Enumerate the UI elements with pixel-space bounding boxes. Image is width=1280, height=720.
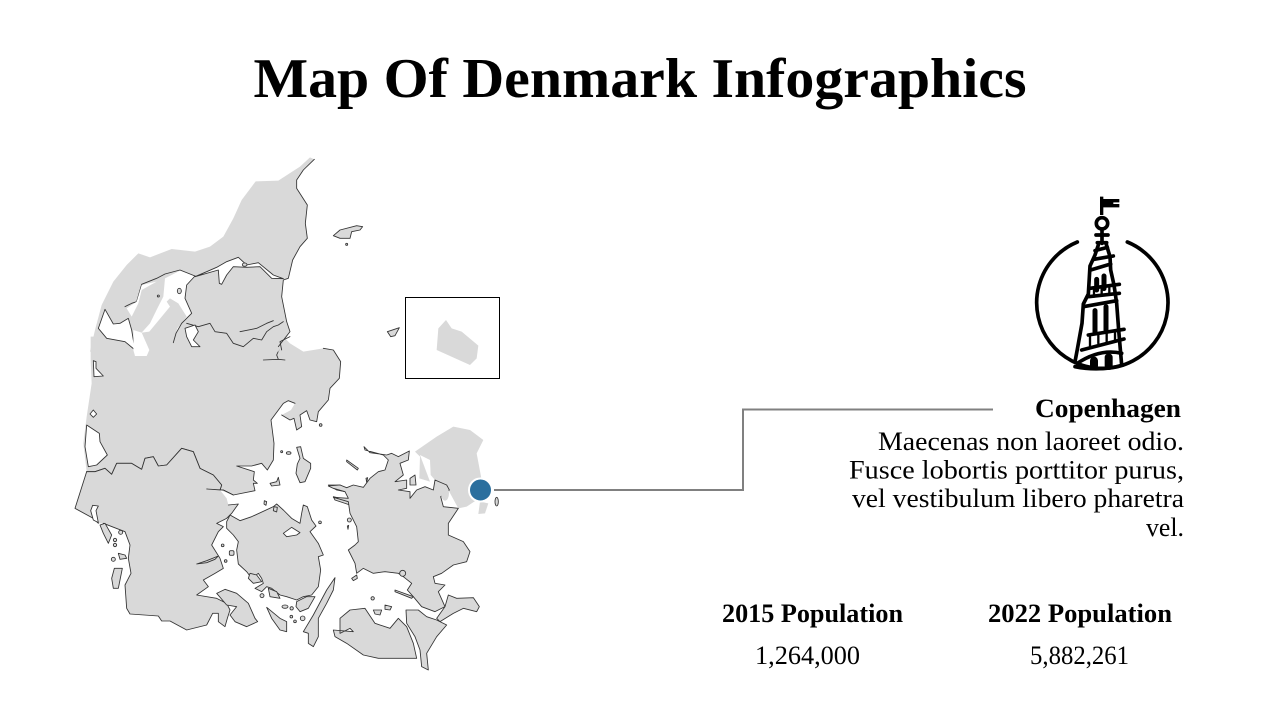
- island: Ærø: [267, 607, 287, 632]
- island: Samsø: [296, 447, 311, 483]
- island: Falster: [406, 610, 447, 670]
- label: Copenhagen: Copenhagen: [1035, 394, 1182, 423]
- stat: 2022 population: 2022 Population: [988, 599, 1173, 628]
- small islands: [111, 501, 321, 623]
- island: Langeland: [303, 578, 335, 647]
- description text: vel vestibulum libero pharetra: [852, 484, 1184, 513]
- map of Denmark: [75, 157, 500, 670]
- island: Rømø: [112, 568, 122, 588]
- stat: 2015 population: 1,264,000: [755, 641, 860, 670]
- description text: Fusce lobortis porttitor purus,: [849, 456, 1184, 484]
- description text: vel.: [1146, 513, 1184, 542]
- island: Møn: [437, 595, 479, 622]
- connector line: [494, 410, 993, 490]
- island: Tåsinge: [296, 597, 315, 612]
- stat: 2022 population: [988, 599, 1173, 670]
- region: central Jutland: [83, 337, 350, 505]
- island: Zealand: [328, 447, 470, 612]
- spire: [1075, 218, 1124, 369]
- stat: 2015 population: [722, 599, 904, 670]
- island: Funen: [227, 504, 323, 600]
- island: Als: [217, 589, 258, 627]
- island: Læsø: [333, 226, 363, 245]
- location marker: Copenhagen: [469, 478, 492, 502]
- description text: [849, 427, 1184, 542]
- title: Map Of Denmark Infographics: [254, 48, 1026, 110]
- flag: [1100, 197, 1119, 215]
- highlighted Copenhagen region: [415, 427, 483, 508]
- description text: Maecenas non laoreet odio.: [878, 427, 1184, 456]
- circle outline: [1037, 242, 1168, 368]
- stat: 2022 population: 5,882,261: [1030, 641, 1129, 670]
- island: Fanø: [100, 523, 112, 543]
- inset box: Bornholm: [406, 298, 500, 378]
- island: Lolland: [333, 608, 417, 658]
- icon: church spire in circle: [1037, 197, 1168, 369]
- region: southern Jutland: [75, 448, 335, 647]
- region: northern Jutland: [90, 157, 314, 356]
- stat: 2015 population: 2015 Population: [722, 599, 904, 628]
- region: Zealand and southern islands: [328, 427, 498, 670]
- small islands: [347, 460, 498, 615]
- island: Anholt: [387, 328, 399, 337]
